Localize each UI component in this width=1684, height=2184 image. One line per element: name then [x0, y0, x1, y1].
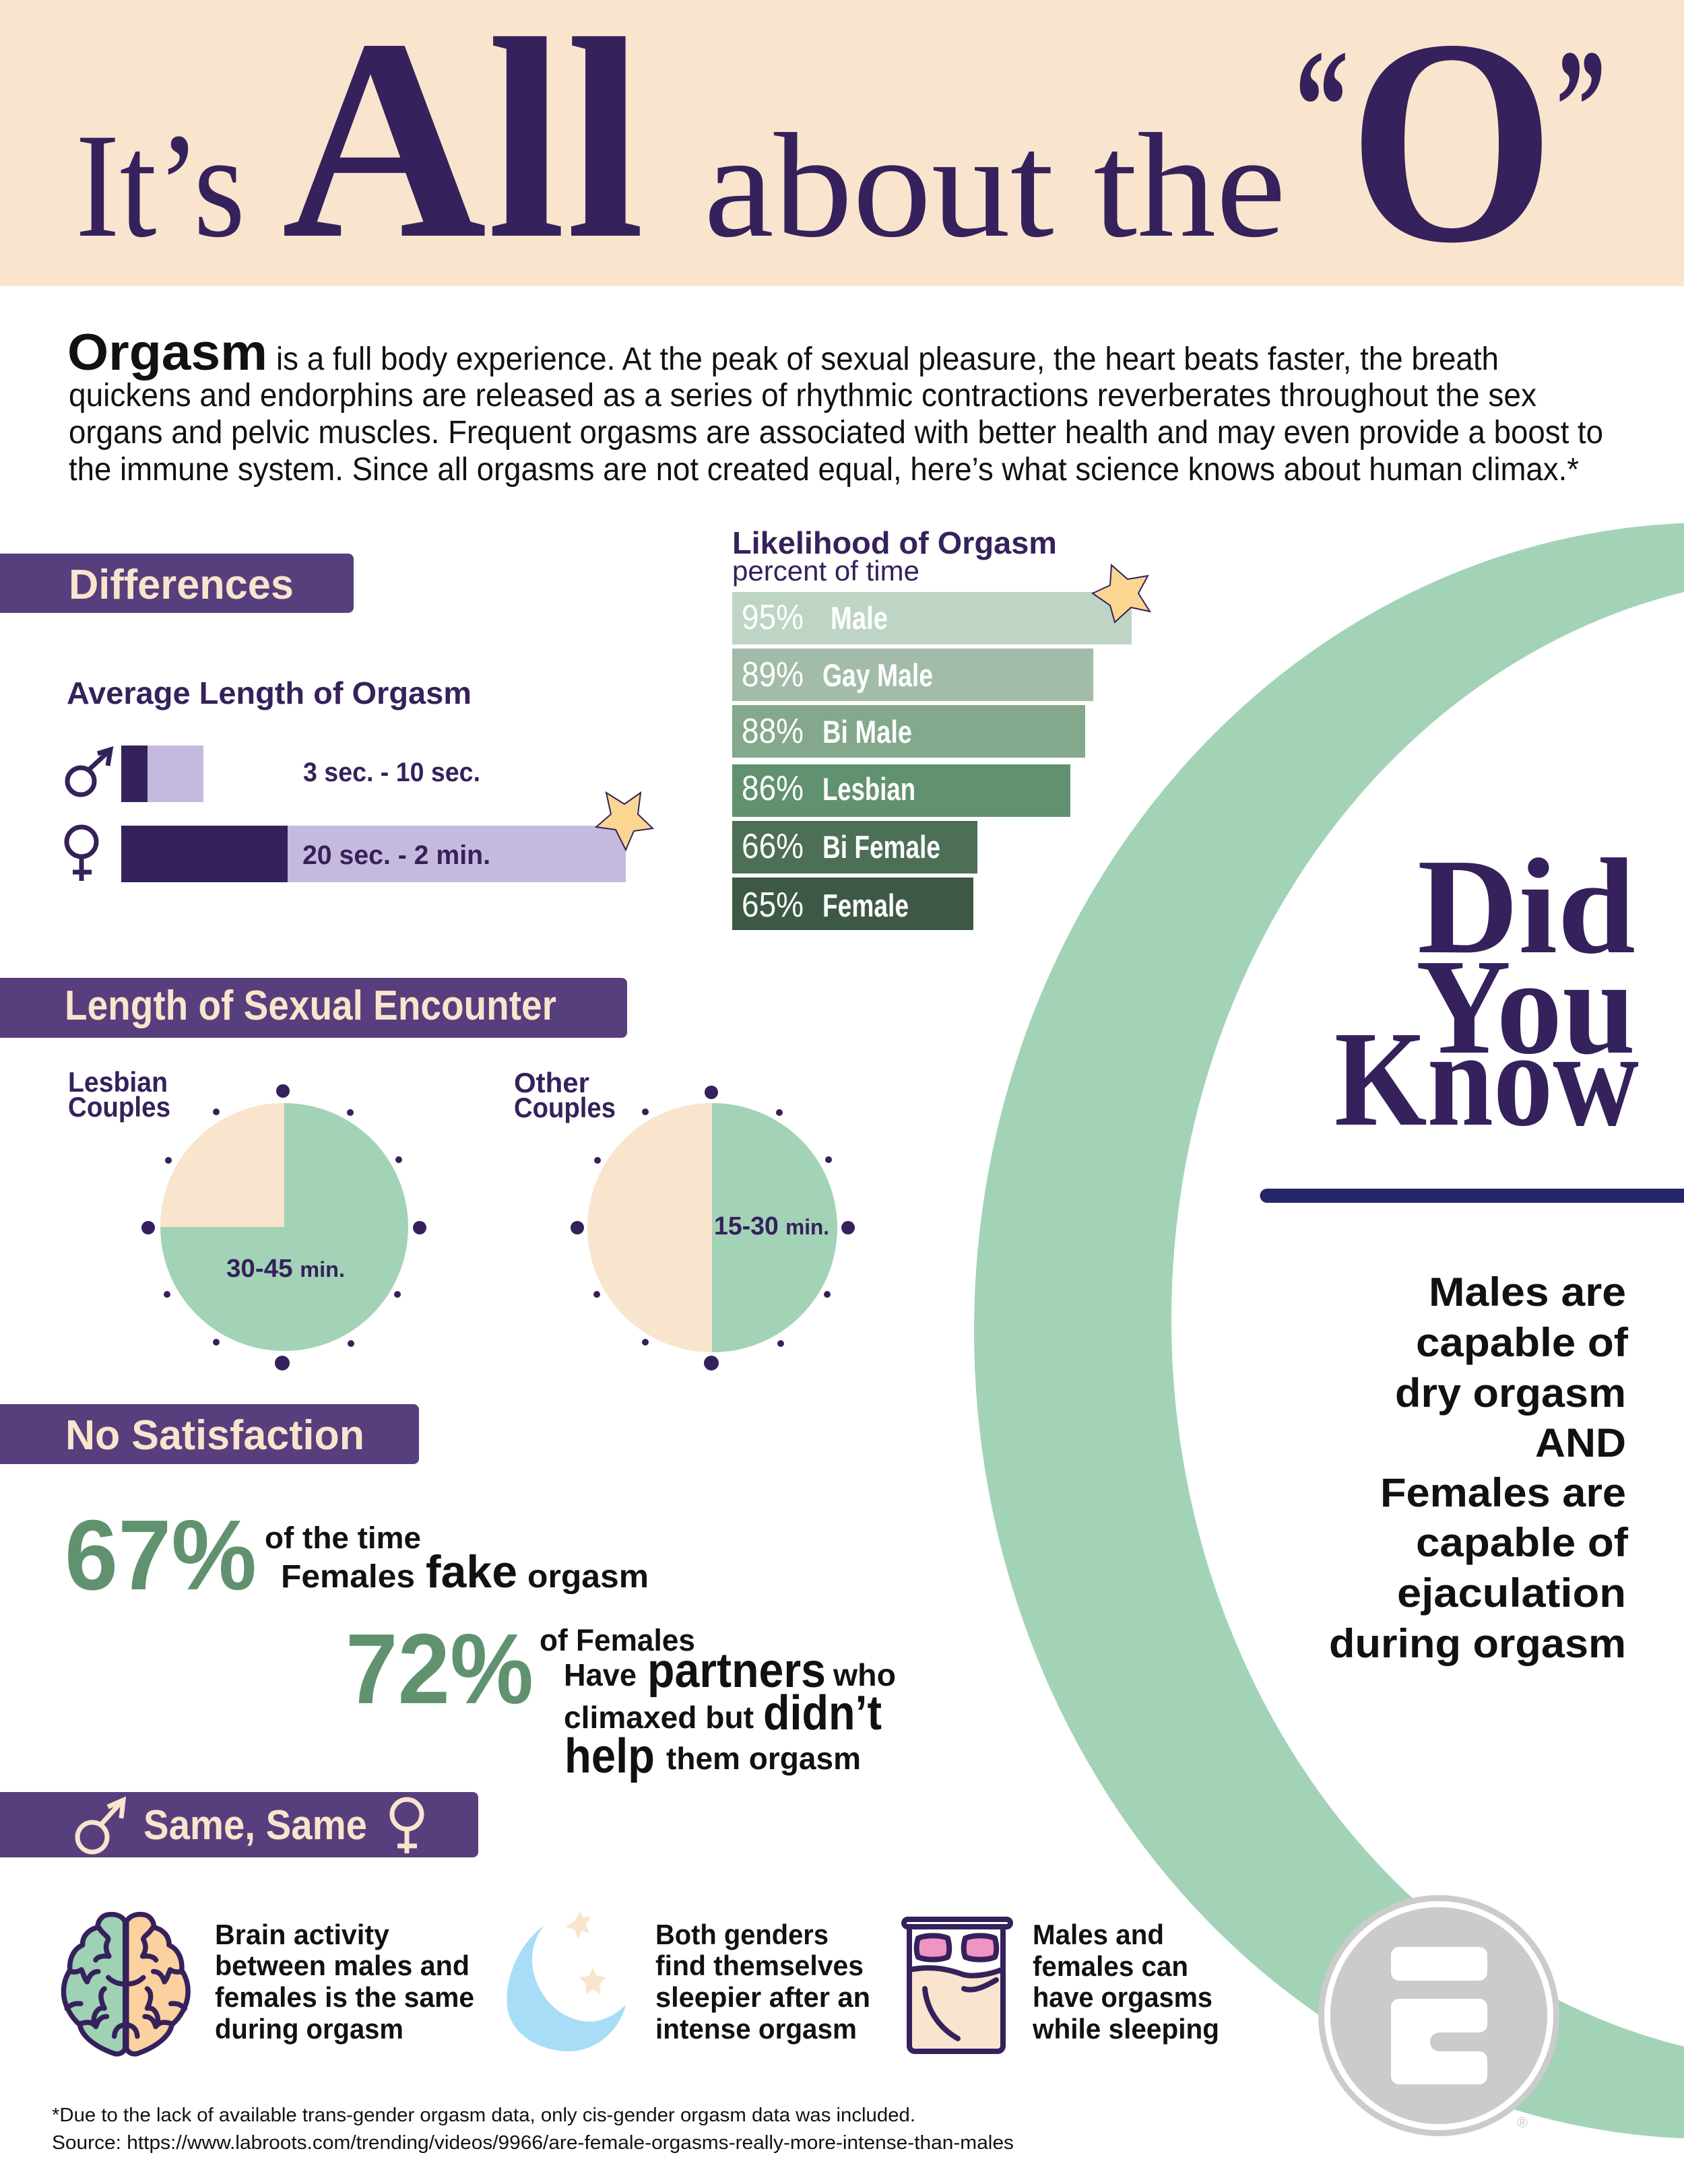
- text: did you know fact: capable of: [1416, 1320, 1629, 1365]
- heading: likelihood of orgasm: Likelihood of Orgasm: [732, 525, 1057, 560]
- stat: 72% partners didn't help: [346, 1614, 896, 1783]
- intro paragraph: the immune system. Since all orgasms are not created equal, here’s what science knows about human climax.*: [69, 452, 1579, 488]
- text: did you know fact: AND: [1535, 1420, 1626, 1465]
- text: males and females sleeping: while sleeping: [1032, 2013, 1219, 2045]
- stat: 67% fake orgasm: orgasm: [527, 1559, 649, 1595]
- heading: did you know: Know: [1334, 1003, 1639, 1154]
- bar: male orgasm length: [121, 746, 480, 802]
- bar: female 65%: Female: [822, 888, 909, 923]
- brain right half: [126, 1915, 188, 2054]
- bar: female 65%: [732, 878, 973, 930]
- bar: female orgasm length: [121, 826, 626, 882]
- text: did you know fact: dry orgasm: [1395, 1370, 1626, 1416]
- bar: female orgasm length: 20 sec. - 2 min.: [302, 840, 490, 870]
- text: did you know fact: during orgasm: [1329, 1621, 1626, 1666]
- stat: 67% fake orgasm: 67%: [65, 1500, 257, 1611]
- icon: brain: [63, 1915, 188, 2054]
- bar: bi female 66%: Bi Female: [822, 829, 940, 865]
- text: males and females sleeping: females can: [1033, 1950, 1188, 1982]
- footnote and source: [52, 2105, 1014, 2154]
- title banner: “: [1295, 16, 1349, 195]
- text: did you know fact: ejaculation: [1397, 1570, 1626, 1616]
- heading: likelihood of orgasm: [732, 525, 1057, 587]
- footnote and source: *Due to the lack of available trans-gender orgasm data, only cis-gender orgasm data was included.: [52, 2105, 915, 2126]
- bar: male orgasm length: 3 sec. - 10 sec.: [303, 758, 480, 787]
- text: brain activity: females is the same: [215, 1981, 474, 2013]
- text: both genders: sleepier after an: [655, 1981, 870, 2013]
- text: both genders: Both genders: [655, 1919, 829, 1950]
- section header: length of sexual encounter: [0, 978, 627, 1038]
- stat: 72% partners didn't help: didn’t: [763, 1686, 882, 1740]
- navy divider line: [1260, 1189, 1684, 1203]
- text: both genders: intense orgasm: [655, 2013, 857, 2045]
- bar: male 95%: 95%: [742, 598, 804, 637]
- bar: gay male 89%: Gay Male: [822, 657, 933, 693]
- stat: 67% fake orgasm: Females: [281, 1559, 415, 1595]
- stat: 72% partners didn't help: 72%: [346, 1614, 533, 1725]
- text: males and females sleeping: [1032, 1919, 1219, 2045]
- stat: 67% fake orgasm: [65, 1500, 649, 1611]
- icon: star on male bar: [1093, 565, 1150, 622]
- bar chart: likelihood of orgasm: [732, 592, 1132, 930]
- bar: gay male 89%: 89%: [742, 655, 804, 694]
- title banner: It’s: [75, 103, 245, 269]
- text: did you know fact: Males are: [1429, 1269, 1626, 1315]
- heading: average length of orgasm: Average Length of Orgasm: [67, 675, 472, 710]
- stat: 67% fake orgasm: of the time: [265, 1521, 421, 1555]
- label: other couples: Couples: [514, 1092, 616, 1123]
- green ring background: [974, 523, 1684, 2139]
- label: lesbian couples: Couples: [68, 1091, 170, 1123]
- icon: star on female bar: [596, 793, 653, 850]
- text: brain activity: between males and: [215, 1950, 469, 1981]
- text: males and females sleeping: Males and: [1033, 1919, 1164, 1950]
- label: lesbian couples: Lesbian: [68, 1066, 168, 1098]
- section header: same, same: [0, 1792, 478, 1857]
- section header: no satisfaction: No Satisfaction: [65, 1412, 364, 1459]
- bar: male 95%: [732, 592, 1132, 644]
- section header: same, same: Same, Same: [143, 1802, 367, 1849]
- bar: bi female 66%: 66%: [742, 827, 804, 866]
- icon: bed: [904, 1919, 1010, 2051]
- brain left half: [63, 1915, 126, 2054]
- pie chart: lesbian couples 30-45 min: [141, 1084, 426, 1370]
- bar: female 65%: 65%: [742, 886, 804, 925]
- title banner: [0, 0, 1684, 304]
- label: other couples: [514, 1067, 616, 1123]
- intro paragraph: [67, 324, 1603, 488]
- stat: 72% partners didn't help: partners: [647, 1644, 826, 1698]
- section header: Differences: [0, 554, 354, 613]
- text: brain activity: during orgasm: [215, 2013, 403, 2045]
- bar: lesbian 86%: [732, 764, 1070, 817]
- heading: did you know: Did: [1417, 830, 1636, 982]
- intro paragraph: organs and pelvic muscles. Frequent orgasms are associated with better health and may even provide a boost to: [69, 415, 1603, 451]
- title banner: about the: [704, 103, 1286, 269]
- text: did you know fact: Females are: [1380, 1470, 1626, 1515]
- text: both genders: find themselves: [655, 1950, 864, 1981]
- section header: Differences: Differences: [69, 562, 294, 608]
- bar: bi male 88%: Bi Male: [822, 714, 912, 750]
- icon: male symbol: [67, 750, 110, 795]
- stat: 72% partners didn't help: them orgasm: [666, 1741, 861, 1776]
- pie chart: other couples 15-30 min: [571, 1086, 855, 1370]
- text: brain activity: [215, 1919, 474, 2045]
- bar: gay male 89%: [732, 649, 1093, 701]
- footnote and source: Source: https://www.labroots.com/trending/videos/9966/are-female-orgasms-really-more-intense-than-males: [52, 2132, 1014, 2154]
- bar: lesbian 86%: 86%: [742, 769, 804, 808]
- stat: 72% partners didn't help: Have: [564, 1657, 637, 1692]
- icon: crescent moon with stars: [507, 1912, 626, 2051]
- heading: did you know: [1334, 830, 1639, 1154]
- stat: 72% partners didn't help: help: [564, 1729, 655, 1783]
- pie chart: other couples 15-30 min: 15-30 min.: [714, 1212, 829, 1240]
- intro paragraph: is a full body experience. At the peak of sexual pleasure, the heart beats faster, the breath: [276, 341, 1499, 377]
- heading: did you know: You: [1416, 931, 1636, 1082]
- text: males and females sleeping: have orgasms: [1033, 1981, 1212, 2013]
- heading: likelihood of orgasm: percent of time: [732, 555, 919, 587]
- logo badge: ®: [1517, 2114, 1528, 2131]
- logo badge: [1318, 1895, 1559, 2136]
- section header: no satisfaction: [0, 1404, 419, 1464]
- bar: bi male 88%: 88%: [742, 712, 804, 751]
- bar: bi female 66%: [732, 821, 977, 873]
- label: other couples: Other: [514, 1067, 589, 1098]
- stat: 67% fake orgasm: fake: [426, 1546, 517, 1597]
- text: brain activity: Brain activity: [215, 1919, 390, 1950]
- text: did you know fact: [1329, 1269, 1629, 1666]
- intro paragraph: quickens and endorphins are released as a series of rhythmic contractions reverberates throughout the sex: [69, 378, 1536, 413]
- label: lesbian couples: [68, 1066, 170, 1123]
- bar: bi male 88%: [732, 705, 1085, 758]
- text: did you know fact: capable of: [1416, 1520, 1629, 1565]
- icon: female symbol: [67, 827, 96, 881]
- stat: 72% partners didn't help: climaxed but: [564, 1700, 754, 1735]
- text: both genders: [655, 1919, 870, 2045]
- stat: 72% partners didn't help: of Females: [540, 1623, 695, 1657]
- title banner: ”: [1556, 16, 1606, 195]
- pie chart: lesbian couples 30-45 min: 30-45 min.: [226, 1255, 345, 1283]
- intro paragraph: Orgasm: [67, 324, 267, 381]
- bar: male 95%: Male: [831, 600, 888, 636]
- bar: lesbian 86%: Lesbian: [822, 771, 915, 807]
- stat: 72% partners didn't help: who: [833, 1657, 896, 1692]
- section header: length of sexual encounter: Length of Sexual Encounter: [65, 983, 556, 1029]
